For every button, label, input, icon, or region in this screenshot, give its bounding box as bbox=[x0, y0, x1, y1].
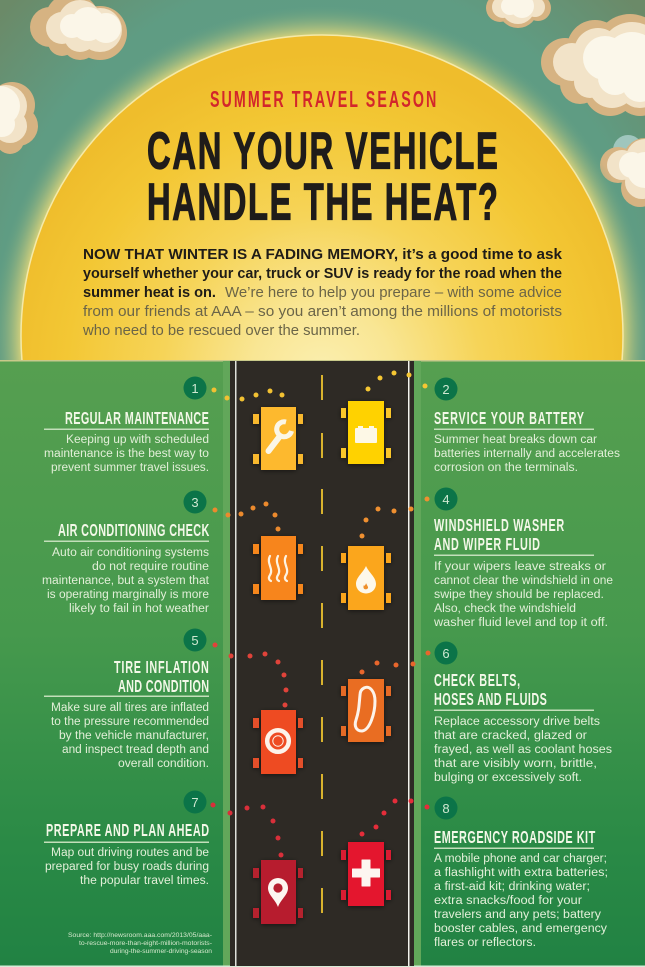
item 1: regular maintenance: Keeping up with scheduled bbox=[66, 434, 209, 446]
source note bbox=[68, 933, 212, 955]
item 1: regular maintenance: prevent summer travel issues. bbox=[51, 462, 209, 474]
item 8: emergency roadside kit: a flashlight with extra batteries; bbox=[434, 867, 608, 879]
item 4: windshield washer and wiper fluid: washer fluid level and top it off. bbox=[433, 617, 608, 629]
item 1: regular maintenance: maintenance is the best way to bbox=[44, 448, 209, 460]
car 1: wrench bbox=[253, 407, 303, 470]
intro paragraph: yourself whether your car, truck or SUV is ready for the road when the bbox=[83, 265, 562, 282]
item 7: prepare and plan ahead: 7 bbox=[191, 795, 199, 810]
icon: tire bbox=[267, 730, 289, 752]
icon: first aid cross bbox=[352, 860, 380, 886]
item 5: tire inflation and condition: TIRE INFLATION bbox=[114, 659, 209, 678]
cloud: top centre right bbox=[486, 0, 551, 28]
item 6: check belts, hoses and fluids bbox=[434, 642, 612, 784]
title: HANDLE THE HEAT? bbox=[147, 174, 498, 231]
dots: car 4 bbox=[360, 496, 430, 538]
item 4: windshield washer and wiper fluid: 4 bbox=[442, 492, 450, 507]
item 7: prepare and plan ahead: prepared for busy roads during bbox=[45, 861, 209, 873]
car 6: belt bbox=[341, 679, 391, 742]
item 4: windshield washer and wiper fluid: AND WIPER FLUID bbox=[434, 536, 540, 555]
item 5: tire inflation and condition: Make sure all tires are inflated bbox=[51, 702, 209, 714]
item 8: emergency roadside kit: extra snacks/food for your bbox=[434, 895, 582, 907]
item 6: check belts, hoses and fluids: HOSES AND FLUIDS bbox=[434, 691, 547, 710]
intro paragraph: NOW THAT WINTER IS A FADING MEMORY, it’s a good time to ask bbox=[83, 246, 563, 263]
item 5: tire inflation and condition: overall condition. bbox=[118, 758, 209, 770]
road bbox=[230, 361, 414, 966]
item 3: air conditioning check: do not require routine bbox=[92, 561, 209, 573]
item 2: service your battery: batteries internally and accelerates bbox=[434, 448, 620, 460]
car 3: heat waves bbox=[253, 536, 303, 600]
item 8: emergency roadside kit bbox=[434, 796, 608, 949]
icon: battery bbox=[355, 426, 377, 443]
item 6: check belts, hoses and fluids: CHECK BELTS, bbox=[434, 672, 520, 691]
car 2: battery bbox=[341, 401, 391, 464]
item 4: windshield washer and wiper fluid: swipe they should be replaced. bbox=[434, 589, 604, 601]
icon: map pin bbox=[268, 878, 288, 907]
item 4: windshield washer and wiper fluid: WINDSHIELD WASHER bbox=[434, 517, 565, 536]
item 3: air conditioning check: 3 bbox=[191, 495, 199, 510]
item 1: regular maintenance bbox=[44, 376, 209, 474]
item 8: emergency roadside kit: booster cables, and emergency bbox=[434, 923, 607, 935]
source note: during-the-summer-driving-season bbox=[110, 949, 212, 955]
item 2: service your battery: corrosion on the terminals. bbox=[434, 462, 578, 474]
item 4: windshield washer and wiper fluid: Also, check the windshield bbox=[434, 603, 576, 615]
item 5: tire inflation and condition: 5 bbox=[191, 633, 199, 648]
source note: to-rescue-more-than-eight-million-motorists- bbox=[79, 941, 212, 947]
item 5: tire inflation and condition: and inspect tread depth and bbox=[62, 744, 209, 756]
dots: car 5 bbox=[212, 642, 288, 708]
dots: car 1 bbox=[212, 388, 284, 402]
item 5: tire inflation and condition: AND CONDITION bbox=[118, 678, 209, 697]
icon: belt bbox=[355, 687, 375, 731]
item 3: air conditioning check: AIR CONDITIONING CHECK bbox=[58, 522, 210, 541]
item 7: prepare and plan ahead: the popular travel times. bbox=[80, 875, 209, 887]
panel: grass background bbox=[0, 360, 645, 967]
dots: car 7 bbox=[210, 802, 284, 858]
item 7: prepare and plan ahead: Map out driving routes and be bbox=[51, 847, 209, 859]
title bbox=[147, 123, 498, 231]
item 8: emergency roadside kit: travelers and any pets; battery bbox=[434, 909, 601, 921]
dots: car 6 bbox=[360, 650, 430, 674]
item 5: tire inflation and condition: to the pressure recommended bbox=[51, 716, 209, 728]
item 7: prepare and plan ahead: PREPARE AND PLAN AHEAD bbox=[46, 822, 209, 841]
dots: car 2 bbox=[366, 370, 428, 392]
car 7: map pin bbox=[253, 860, 303, 924]
icon: heat waves bbox=[269, 556, 287, 581]
item 3: air conditioning check: is operating marginally is more bbox=[47, 589, 209, 601]
item 6: check belts, hoses and fluids: 6 bbox=[442, 646, 450, 661]
item 8: emergency roadside kit: 8 bbox=[442, 801, 450, 816]
item 5: tire inflation and condition bbox=[44, 628, 209, 770]
item 3: air conditioning check bbox=[42, 490, 210, 615]
item 2: service your battery: SERVICE YOUR BATTERY bbox=[434, 410, 584, 429]
sun bbox=[0, 6, 645, 666]
intro paragraph bbox=[82, 246, 563, 339]
car 5: tire bbox=[253, 710, 303, 774]
item 4: windshield washer and wiper fluid: If your wipers leave streaks or bbox=[434, 561, 606, 573]
intro paragraph: who need to be rescued over the summer. bbox=[82, 322, 360, 339]
dots: car 3 bbox=[212, 502, 280, 532]
item 4: windshield washer and wiper fluid bbox=[433, 488, 613, 629]
item 3: air conditioning check: likely to fail in hot weather bbox=[69, 603, 209, 615]
item 1: regular maintenance: REGULAR MAINTENANCE bbox=[65, 410, 209, 429]
subtitle: SUMMER TRAVEL SEASON bbox=[210, 88, 436, 113]
item 3: air conditioning check: Auto air conditioning systems bbox=[52, 547, 209, 559]
item 6: check belts, hoses and fluids: Replace accessory drive belts bbox=[434, 716, 600, 728]
icon: drop bbox=[356, 566, 376, 594]
item 8: emergency roadside kit: EMERGENCY ROADSIDE KIT bbox=[434, 829, 595, 848]
item 6: check belts, hoses and fluids: bulging or excessively soft. bbox=[434, 772, 582, 784]
item 6: check belts, hoses and fluids: that are cracked, glazed or bbox=[434, 730, 587, 742]
item 2: service your battery: 2 bbox=[442, 382, 450, 397]
item 8: emergency roadside kit: flares or reflectors. bbox=[434, 937, 536, 949]
intro paragraph: We’re here to help you prepare – with some advice bbox=[225, 284, 562, 301]
cloud: left edge bbox=[0, 82, 38, 154]
car 8: first aid bbox=[341, 842, 391, 906]
icon: wrench bbox=[268, 422, 292, 451]
source note: Source: http://newsroom.aaa.com/2013/05/aaa- bbox=[68, 933, 212, 939]
item 4: windshield washer and wiper fluid: cannot clear the windshield in one bbox=[434, 575, 613, 587]
item 3: air conditioning check: maintenance, but a system that bbox=[42, 575, 210, 587]
item 1: regular maintenance: 1 bbox=[191, 381, 199, 396]
title: CAN YOUR VEHICLE bbox=[147, 123, 498, 180]
item 7: prepare and plan ahead bbox=[44, 790, 209, 887]
background: sky bbox=[0, 0, 645, 361]
item 6: check belts, hoses and fluids: frayed, as well as coolant hoses bbox=[434, 744, 612, 756]
item 6: check belts, hoses and fluids: that are visibly worn, brittle, bbox=[434, 758, 597, 770]
item 8: emergency roadside kit: a first-aid kit; drinking water; bbox=[434, 881, 590, 893]
cloud: right edge bbox=[600, 135, 645, 207]
cloud: top right bbox=[541, 14, 645, 116]
cloud: top left bbox=[30, 0, 127, 60]
dots: car 8 bbox=[360, 798, 430, 836]
intro paragraph: summer heat is on. bbox=[83, 284, 216, 301]
item 2: service your battery bbox=[434, 378, 620, 474]
item 8: emergency roadside kit: A mobile phone and car charger; bbox=[434, 853, 607, 865]
intro paragraph: from our friends at AAA – so you aren’t among the millions of motorists bbox=[83, 303, 562, 320]
item 5: tire inflation and condition: by the vehicle manufacturer, bbox=[59, 730, 209, 742]
car 4: fluid drop bbox=[341, 546, 391, 610]
item 2: service your battery: Summer heat breaks down car bbox=[434, 434, 597, 446]
